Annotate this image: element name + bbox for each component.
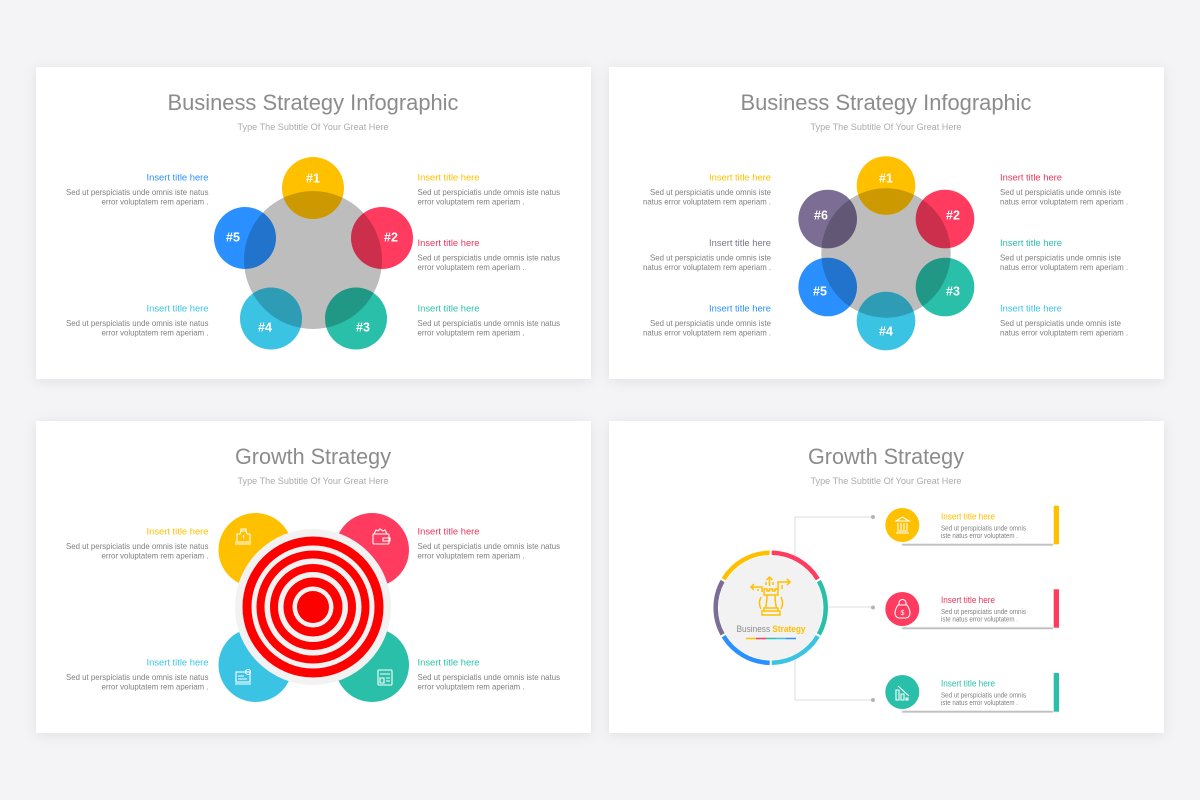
quarter circle: yellow — [218, 513, 292, 587]
icon: document calculator — [378, 670, 392, 685]
icon: money weight — [895, 600, 910, 618]
text block: item 1: Insert title here — [709, 172, 771, 184]
text block: item 1: error voluptatem rem aperiam . — [418, 196, 524, 206]
card: pink: Sed ut perspiciatis unde omnis — [941, 607, 1026, 616]
text block: item 2: Sed ut perspiciatis unde omnis iste — [1000, 187, 1121, 197]
text block: item 5 — [643, 304, 771, 338]
text block: item 1: Insert title here — [418, 172, 480, 184]
text block: item 4 — [66, 304, 208, 338]
text block: cyan item: Insert title here — [146, 658, 208, 668]
text block: item 5: Insert title here — [146, 172, 208, 184]
five-circle diagram: #2 — [384, 230, 398, 244]
text block: yellow item: Insert title here — [146, 526, 208, 538]
text block: item 2: Insert title here — [418, 238, 480, 249]
text block: item 6: Insert title here — [709, 238, 771, 249]
card: teal — [885, 673, 1059, 712]
six-circle diagram: #4 — [879, 324, 893, 338]
panel: growth strategy target — [36, 421, 591, 733]
text block: item 1 — [643, 172, 771, 206]
icon: laptop chart — [235, 670, 251, 684]
hub circle — [714, 551, 828, 665]
card: yellow: iste natus error voluptatem . — [941, 531, 1018, 540]
text block: item 3: Sed ut perspiciatis unde omnis iste natus — [418, 318, 560, 328]
text block: item 3: error voluptatem rem aperiam . — [418, 328, 524, 338]
card: yellow — [885, 506, 1059, 546]
text block: item 1: natus error voluptatem rem aperiam . — [643, 196, 771, 206]
text block: item 2: Insert title here — [1000, 172, 1062, 184]
text block: item 3: natus error voluptatem rem aperiam . — [1000, 262, 1128, 272]
text block: yellow item: error voluptatem rem aperiam . — [102, 550, 208, 560]
icon: bank — [896, 517, 909, 533]
panel: growth strategy hub — [609, 421, 1164, 733]
icon: money weight: $ — [901, 610, 905, 617]
subtitle: Type The Subtitle Of Your Great Here — [238, 476, 388, 487]
title: Business Strategy Infographic — [168, 90, 458, 115]
text block: item 6: natus error voluptatem rem aperiam . — [643, 262, 771, 272]
text block: item 4: error voluptatem rem aperiam . — [102, 328, 208, 338]
subtitle: Type The Subtitle Of Your Great Here — [810, 476, 962, 487]
quarter circle: pink — [335, 513, 409, 587]
quarter circle: teal — [335, 628, 409, 702]
card: yellow: Insert title here — [941, 512, 995, 522]
five-circle diagram: #5 — [226, 230, 240, 244]
text block: item 2 — [418, 238, 560, 272]
panel: six-step business strategy — [609, 67, 1164, 379]
subtitle: Type The Subtitle Of Your Great Here — [810, 122, 962, 133]
text block: cyan item: Sed ut perspiciatis unde omnis iste natus — [66, 672, 208, 682]
text block: pink item: Sed ut perspiciatis unde omnis iste natus — [418, 541, 560, 551]
connector lines — [795, 515, 875, 702]
text block: item 4: Insert title here — [146, 304, 208, 314]
card: yellow: Sed ut perspiciatis unde omnis — [941, 524, 1026, 532]
text block: item 2: error voluptatem rem aperiam . — [418, 262, 524, 272]
quarter circle: cyan — [218, 628, 292, 702]
card: teal: Sed ut perspiciatis unde omnis — [941, 690, 1026, 700]
text block: pink item — [418, 526, 560, 560]
icon: wallet — [373, 529, 390, 544]
five-circle diagram: #3 — [356, 320, 370, 334]
text block: item 1: Sed ut perspiciatis unde omnis iste natus — [418, 187, 560, 197]
five-circle diagram — [214, 157, 413, 350]
text block: teal item — [418, 658, 560, 692]
text block: teal item: Insert title here — [418, 658, 480, 668]
text block: item 3 — [1000, 238, 1128, 272]
text block: item 1 — [418, 172, 560, 206]
text block: item 4: natus error voluptatem rem aperiam . — [1000, 328, 1128, 338]
title: Growth Strategy — [235, 444, 392, 469]
icon: falling bars — [896, 686, 909, 700]
six-circle diagram: #2 — [946, 208, 960, 222]
text block: item 4: Sed ut perspiciatis unde omnis iste natus — [66, 318, 208, 328]
text block: item 4: Insert title here — [1000, 304, 1062, 314]
text block: item 4 — [1000, 304, 1128, 338]
text block: item 3: Insert title here — [418, 304, 480, 314]
title: Growth Strategy — [808, 444, 965, 469]
text block: item 6 — [643, 238, 771, 272]
card: teal: iste natus error voluptatem . — [941, 698, 1018, 707]
text block: item 5: Sed ut perspiciatis unde omnis iste natus — [66, 187, 208, 197]
text block: pink item: error voluptatem rem aperiam . — [418, 550, 524, 560]
title: Business Strategy Infographic — [740, 90, 1032, 115]
six-circle diagram: #6 — [814, 208, 828, 222]
six-circle diagram: #3 — [946, 284, 960, 298]
text block: cyan item: error voluptatem rem aperiam . — [102, 682, 208, 692]
text block: item 2: Sed ut perspiciatis unde omnis iste natus — [418, 252, 560, 262]
five-circle diagram: #4 — [258, 320, 272, 334]
text block: item 5: Insert title here — [709, 304, 771, 314]
panel: five-step business strategy — [36, 67, 591, 379]
icon: money bag on laptop — [235, 529, 251, 544]
target rings — [235, 529, 391, 685]
text block: item 3: Insert title here — [1000, 238, 1062, 249]
text block: item 3 — [418, 304, 560, 338]
text block: item 2: natus error voluptatem rem aperiam . — [1000, 196, 1128, 206]
six-circle diagram — [798, 156, 974, 350]
text block: item 5: Sed ut perspiciatis unde omnis iste — [650, 318, 771, 328]
text block: teal item: Sed ut perspiciatis unde omnis iste natus — [418, 672, 560, 682]
card: teal: Insert title here — [941, 678, 995, 690]
text block: yellow item: Sed ut perspiciatis unde omnis iste natus — [66, 541, 208, 551]
card: pink: Insert title here — [941, 595, 995, 606]
text block: pink item: Insert title here — [418, 526, 480, 538]
text block: item 1: Sed ut perspiciatis unde omnis iste — [650, 187, 771, 197]
text block: item 2 — [1000, 172, 1128, 206]
card: pink: iste natus error voluptatem . — [941, 614, 1018, 624]
text block: item 5: natus error voluptatem rem aperiam . — [643, 328, 771, 338]
text block: item 5: error voluptatem rem aperiam . — [102, 196, 208, 206]
text block: cyan item — [66, 658, 208, 692]
icon: chess rook with arrows — [751, 577, 790, 615]
subtitle: Type The Subtitle Of Your Great Here — [238, 122, 388, 133]
hub label: Business Strategy — [736, 624, 806, 634]
text block: item 3: Sed ut perspiciatis unde omnis iste — [1000, 252, 1121, 262]
five-circle diagram: #1 — [306, 172, 320, 186]
text block: item 6: Sed ut perspiciatis unde omnis iste — [650, 252, 771, 262]
text block: yellow item — [66, 526, 208, 560]
text block: teal item: error voluptatem rem aperiam . — [418, 682, 524, 692]
card: pink — [885, 589, 1059, 629]
six-circle diagram: #5 — [813, 284, 827, 298]
text block: item 4: Sed ut perspiciatis unde omnis iste — [1000, 318, 1121, 328]
hub underline — [746, 638, 796, 640]
text block: item 5 — [66, 172, 208, 206]
six-circle diagram: #1 — [879, 172, 893, 186]
